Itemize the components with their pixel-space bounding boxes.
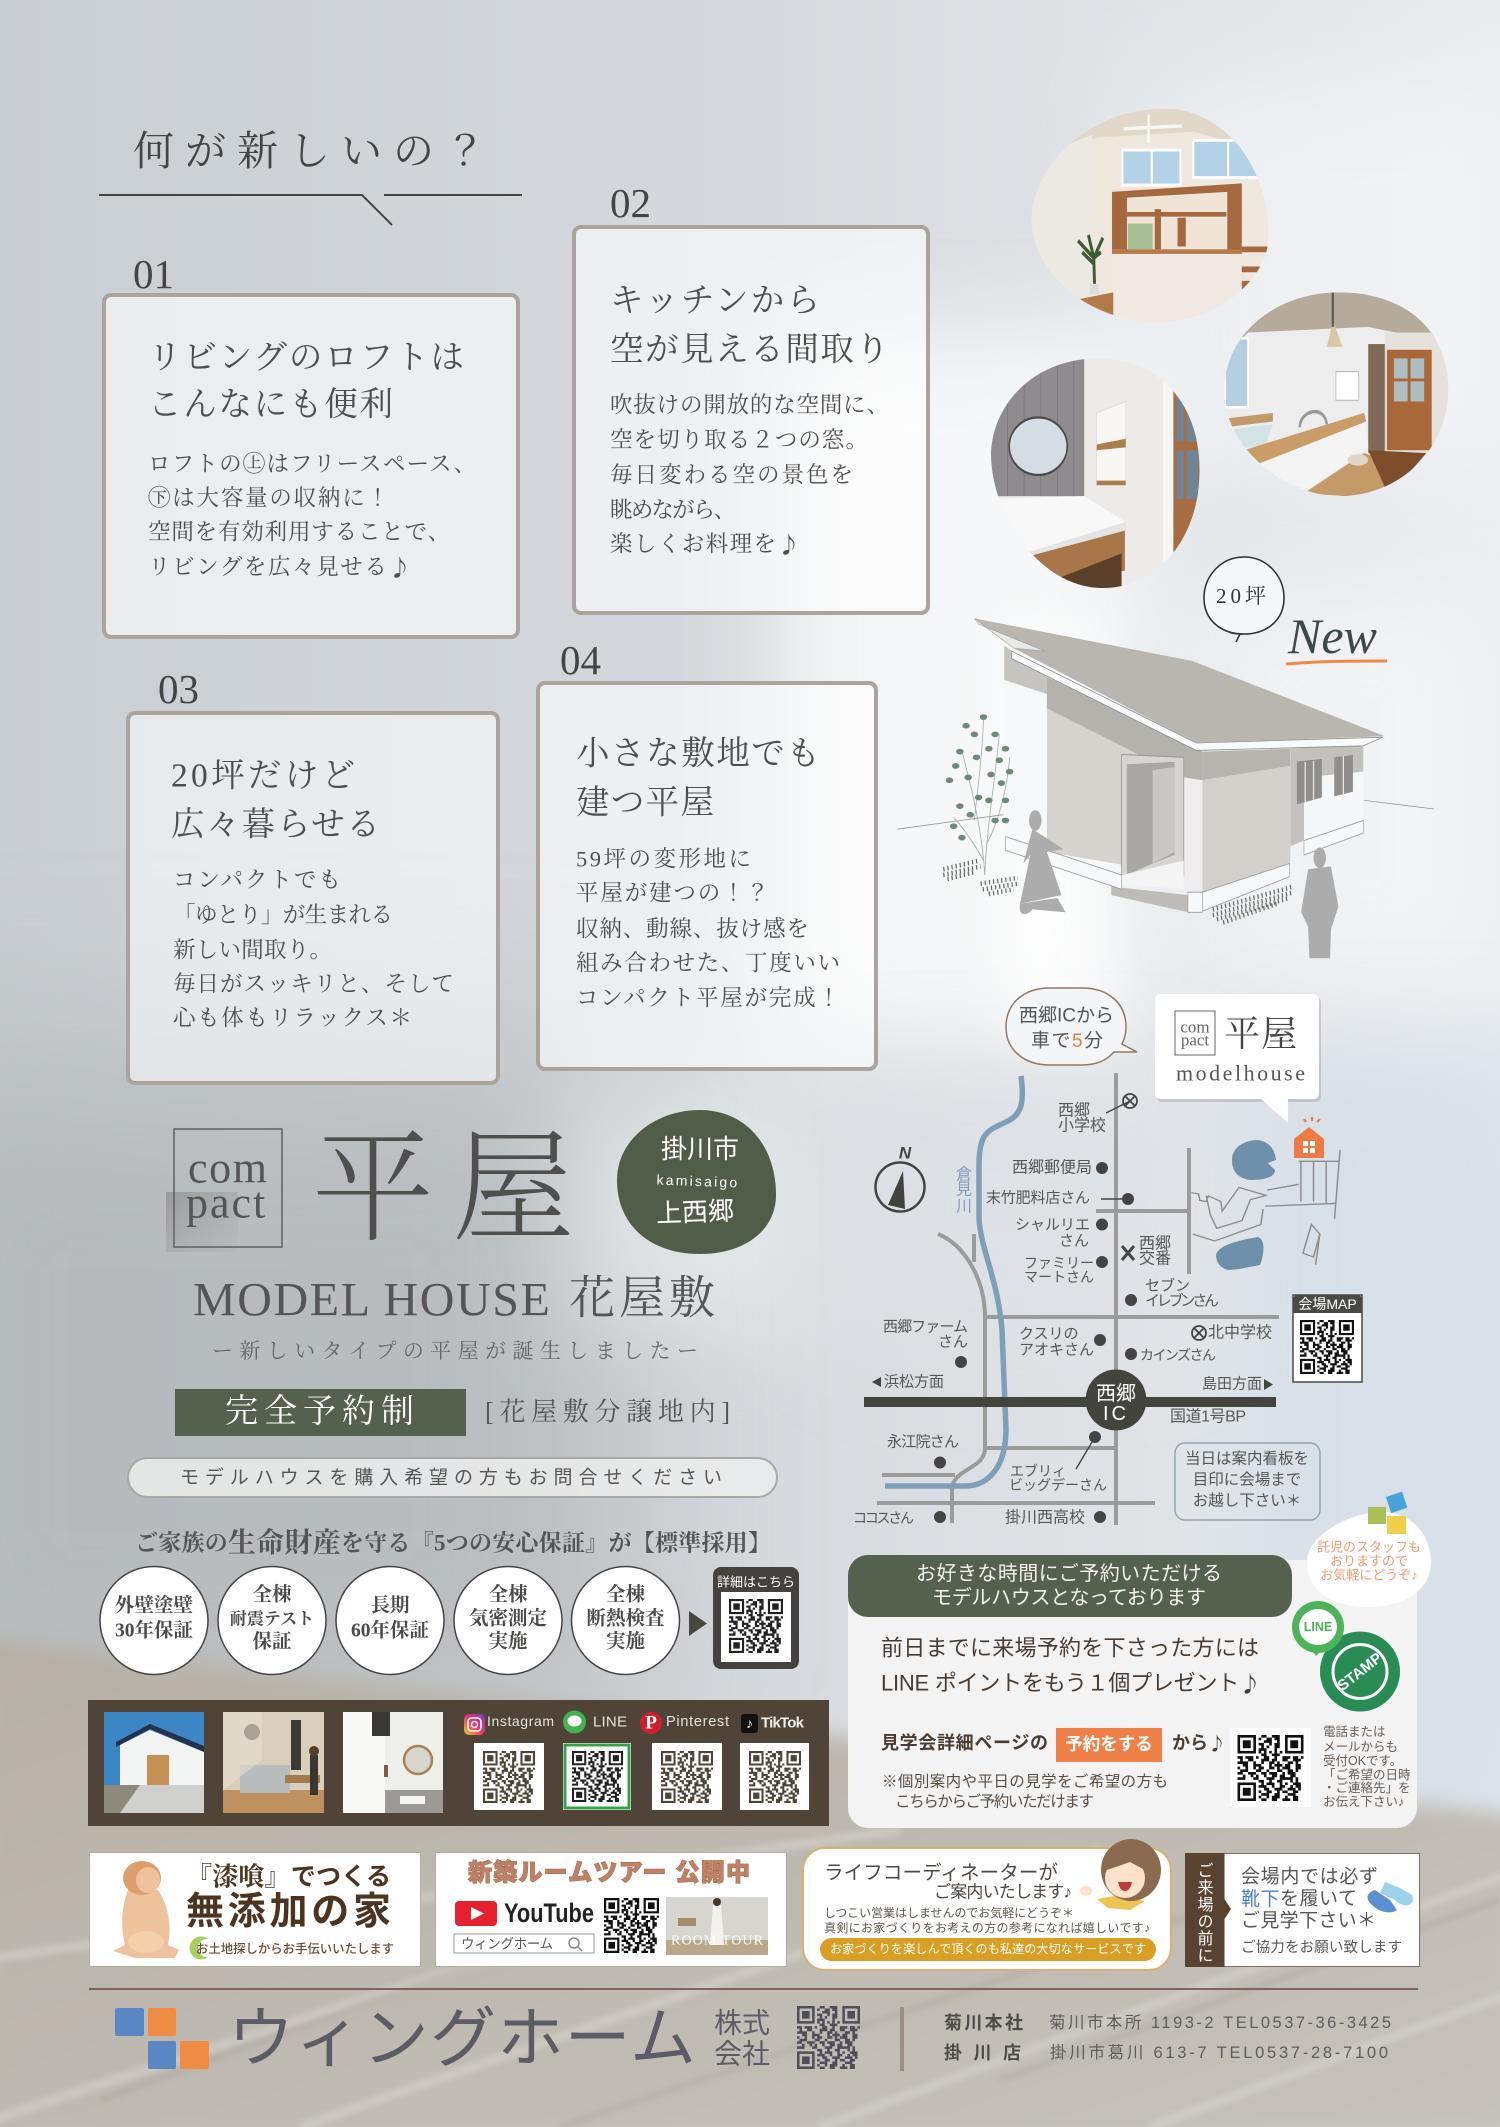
button: 予約をする (1056, 1728, 1162, 1762)
footer: addresses (900, 2007, 1391, 2071)
banner: socks notice: ご見学下さい＊ (1241, 1910, 1376, 1932)
badge: 掛川市 上西郷: 掛川市 (661, 1134, 739, 1164)
place labels: 西郷 (1139, 1234, 1171, 1252)
place labels: エブリィ (1010, 1463, 1066, 1479)
panel 04: small site: 収納、動線、抜け感を (576, 916, 809, 942)
YouTube logo (455, 1898, 594, 1928)
gold pill: お家づくりを楽しんで頂くのも私達の大切なサービスです (830, 1942, 1146, 1956)
photo: washroom (343, 1712, 443, 1813)
QR: 会場MAP (1293, 1295, 1362, 1382)
side tab: ご来場の前に: ご来場の前に (1194, 1862, 1214, 1964)
YouTube logo: YouTube (504, 1898, 594, 1928)
footer: company logo: 会社 (714, 2038, 770, 2070)
panel 04: small site: 小さな敷地でも (576, 736, 820, 772)
place labels: 川 (956, 1198, 972, 1216)
heading: 5つの安心保証: ご家族の生命財産を守る『5つの安心保証』が【標準採用】 (135, 1526, 771, 1558)
banner: socks notice: 会場内では必ず (1241, 1866, 1378, 1888)
button: 予約をする: 予約をする (1065, 1734, 1153, 1754)
panel 01: loft: ロフトの㊤はフリースペース、 (148, 452, 476, 476)
compact box: pact (186, 1178, 267, 1228)
callout: compact 平屋 modelhouse: pact (1181, 1030, 1209, 1050)
place labels: マートさん (1024, 1269, 1094, 1285)
place labels: 島田方面 (1202, 1376, 1262, 1392)
header band: お好きな時間にご予約いただける (916, 1562, 1222, 1585)
circle: 30 year (100, 1566, 208, 1674)
footer: addresses: 掛川市葛川 613-7 TEL0537-28-7100 (1050, 2043, 1388, 2062)
IC marker (1086, 1370, 1146, 1430)
photo: kitchen (1221, 290, 1451, 499)
school and police markers (1122, 1094, 1206, 1340)
icon: LINE stamp: LINE (1304, 1620, 1332, 1634)
side tab: ご来場の前に (1185, 1853, 1231, 1967)
banner: plaster house: 『漆喰』でつくる (186, 1862, 391, 1892)
panel 03: 20 tsubo: 心も体もリラックス＊ (173, 1006, 412, 1030)
circle: seismic: 耐震テスト (230, 1608, 314, 1628)
QR codes (474, 1743, 809, 1810)
Instagram (464, 1713, 554, 1735)
panel 01: loft (104, 251, 518, 637)
panel 01: loft: こんなにも便利 (148, 386, 393, 424)
panel 03: 20 tsubo: 03 (158, 666, 199, 712)
panel 02: kitchen: 毎日変わる空の景色を (610, 462, 853, 488)
place labels: 西郷ファーム (883, 1318, 968, 1336)
footer: company logo: ウィングホーム (228, 2001, 696, 2075)
room tour thumbnail (666, 1897, 768, 1955)
search box: ウィングホーム (461, 1936, 553, 1952)
footer divider (89, 1988, 1418, 1990)
panel: reservation: 見学会詳細ページの (881, 1732, 1048, 1753)
place labels: 西郷郵便局 (1012, 1158, 1092, 1176)
TikTok (741, 1714, 805, 1733)
LINE: LINE (593, 1714, 627, 1730)
header band (848, 1555, 1292, 1617)
callout: compact 平屋 modelhouse: 平屋 (1224, 1014, 1298, 1054)
panel: reservation: LINE ポイントをもう１個プレゼント♪ (881, 1667, 1261, 1699)
panel 03: 20 tsubo (128, 666, 498, 1083)
circle: airtight (454, 1566, 562, 1674)
banner: socks notice: 靴下を履いて (1241, 1888, 1357, 1910)
photo: loft living (1028, 103, 1273, 327)
circle: airtight: 気密測定 (469, 1608, 547, 1630)
panel 03: 20 tsubo: 新しい間取り。 (173, 938, 332, 962)
QR (1230, 1728, 1311, 1807)
circle: insulation: 全棟 (606, 1584, 645, 1606)
roads (877, 1073, 1279, 1525)
photo: house exterior (104, 1712, 204, 1813)
panel 02: kitchen: 空が見える間取り (610, 332, 889, 368)
circle: 60 year: 長期 (370, 1594, 410, 1616)
Pinterest: P (645, 1712, 657, 1734)
panel 01: loft: リビングを広々見せる♪ (148, 551, 411, 583)
panel 04: small site: 平屋が建つの！？ (576, 880, 769, 906)
note: 当日は案内看板: 当日は案内看板を (1185, 1450, 1309, 1468)
callout: childcare staff: 託児のスタッフも (1317, 1540, 1421, 1554)
note: phone or email: ・ご連絡先」を (1323, 1780, 1411, 1795)
Instagram: Instagram (487, 1713, 554, 1729)
place labels: 倉 (956, 1166, 972, 1184)
IC marker: IC (1103, 1403, 1129, 1425)
panel 04: small site: 建つ平屋 (576, 784, 714, 822)
panel 04: small site: コンパクト平屋が完成！ (576, 986, 840, 1010)
title: 何が新しいの？ (99, 128, 522, 225)
tree and shrubs (943, 714, 1294, 923)
panel 04: small site (538, 637, 876, 1069)
banner: socks notice (1185, 1853, 1420, 1967)
New script mark: New (1287, 608, 1377, 664)
panel 02: kitchen: 吹抜けの開放的な空間に、 (610, 392, 889, 418)
direction arrows (872, 1377, 1273, 1390)
place labels: 北中学校 (1208, 1324, 1272, 1342)
circle: seismic (218, 1566, 326, 1674)
callout: 5 minutes from IC (1006, 988, 1137, 1065)
circle: 60 year (336, 1566, 444, 1674)
arrow (689, 1611, 707, 1636)
callout: compact 平屋 modelhouse: modelhouse (1176, 1060, 1305, 1086)
label: 完全予約制 (175, 1389, 466, 1436)
badge: 掛川市 上西郷: 上西郷 (655, 1196, 735, 1228)
place labels: 交番 (1139, 1250, 1171, 1268)
banner: socks notice: ご協力をお願い致します (1241, 1939, 1402, 1956)
icon: house marker (1294, 1117, 1324, 1158)
band: photos and SNS (88, 1700, 829, 1826)
place labels: シャルリエ (1015, 1216, 1090, 1234)
tagline: ー新しいタイプの平屋が誕生しましたー (212, 1339, 698, 1363)
panel 02: kitchen: キッチンから (610, 282, 820, 320)
banner: life coordinator: しつこい営業はしませんのでお気軽にどうぞ＊ (824, 1905, 1074, 1920)
panel 02: kitchen: 眺めながら、 (610, 498, 736, 522)
callout: 20坪: 20坪 (1216, 584, 1270, 608)
logo squares (115, 2008, 209, 2069)
place labels: ファミリー (1024, 1255, 1094, 1271)
search box (454, 1934, 594, 1953)
circle: seismic: 全棟 (252, 1584, 292, 1606)
banner: life coordinator: ご案内いたします♪ (934, 1882, 1072, 1902)
place labels: 永江院さん (887, 1434, 959, 1450)
circle: seismic: 保証 (252, 1630, 292, 1652)
panel: reservation (848, 1555, 1417, 1828)
note: 当日は案内看板 (1175, 1443, 1320, 1520)
banner: life coordinator (803, 1839, 1171, 1970)
icon: north compass (876, 1144, 924, 1212)
place labels: さん (1059, 1232, 1089, 1250)
logo: compact 平屋: 平屋 (312, 1122, 592, 1258)
badge: 掛川市 上西郷: kamisaigo (656, 1172, 740, 1190)
panel 02: kitchen (574, 180, 928, 613)
footer: addresses: 菊川市本所 1193-2 TEL0537-36-3425 (1049, 2013, 1391, 2032)
panel 03: 20 tsubo: コンパクトでも (173, 868, 341, 892)
Pinterest: Pinterest (666, 1714, 729, 1730)
title: 何が新しいの？: 何が新しいの？ (133, 128, 497, 174)
header band: モデルハウスとなっております (932, 1586, 1206, 1609)
panel: reservation: から♪ (1172, 1730, 1226, 1756)
panel: reservation: ※個別案内や平日の見学をご希望の方も (882, 1772, 1168, 1790)
pill: purchase notice (128, 1458, 777, 1497)
panel 02: kitchen: 02 (610, 180, 651, 226)
panel 04: small site: 組み合わせた、丁度いい (576, 950, 840, 976)
place labels: クスリの (1019, 1326, 1079, 1342)
QR: 詳細はこちら: 詳細はこちら (717, 1574, 795, 1590)
panel 02: kitchen: 空を切り取る２つの窓。 (610, 428, 868, 452)
note: phone or email: 受付OKです。 (1323, 1754, 1402, 1768)
photo: family in kitchen (223, 1712, 324, 1813)
footer: addresses: 掛川店 (944, 2042, 1021, 2063)
place labels: さん (938, 1334, 968, 1350)
pill: purchase notice: モデルハウスを購入希望の方もお問合せください (180, 1466, 722, 1488)
QR: 詳細はこちら (713, 1567, 799, 1669)
circle: airtight: 全棟 (488, 1584, 528, 1606)
label: 完全予約制: 完全予約制 (225, 1393, 420, 1430)
callout: 5 minutes from IC: 西郷ICから (1019, 1004, 1114, 1026)
note: phone or email: 「ご希望の日時 (1323, 1767, 1411, 1782)
place labels: 末竹肥料店さん (986, 1190, 1090, 1206)
baby (113, 1861, 179, 1958)
panel 01: loft: 01 (133, 251, 174, 297)
note: phone or email (1323, 1725, 1411, 1809)
icon: LINE stamp (1292, 1601, 1400, 1712)
note: phone or email: 電話または (1323, 1725, 1386, 1739)
place labels: セブン (1145, 1276, 1190, 1294)
place dots (934, 1101, 1137, 1523)
logo: compact 平屋 (166, 1122, 592, 1258)
QR: 会場MAP: 会場MAP (1298, 1296, 1357, 1312)
footer: addresses: 菊川本社 (944, 2013, 1023, 2033)
streets (1191, 1150, 1340, 1265)
heading: MODEL HOUSE 花屋敷: 花屋敷 (569, 1272, 719, 1324)
character: coordinator (1080, 1839, 1161, 1910)
panel 03: 20 tsubo: 広々暮らせる (171, 806, 380, 844)
note: phone or email: メールからも (1323, 1740, 1398, 1754)
map (853, 1073, 1340, 1526)
place labels: 浜松方面 (884, 1374, 944, 1390)
place labels: カインズさん (1140, 1347, 1216, 1363)
banner: life coordinator: ライフコーディネーターが (824, 1862, 1058, 1884)
footer: company logo: 株式 (714, 2008, 770, 2038)
place labels: 西郷 (1058, 1102, 1090, 1120)
badge: 掛川市 上西郷 (617, 1110, 776, 1254)
panel 03: 20 tsubo: 20坪だけど (171, 758, 355, 794)
gold pill (820, 1938, 1156, 1961)
river (885, 1076, 1022, 1486)
place labels (853, 1102, 1272, 1526)
panel: reservation: こちらからご予約いただけます (895, 1792, 1094, 1810)
panel 01: loft: ㊦は大容量の収納に！ (148, 486, 389, 510)
banner: plaster house: お土地探しからお手伝いいたします (196, 1941, 394, 1956)
icon: socks (1368, 1882, 1413, 1912)
Pinterest (640, 1712, 729, 1734)
panel 01: loft: リビングのロフトは (148, 340, 464, 376)
icon: LINE stamp: STAMP (1335, 1649, 1385, 1695)
heading: MODEL HOUSE 花屋敷 (193, 1272, 719, 1326)
national road (864, 1397, 1276, 1407)
callout: childcare staff: お気軽にどうぞ♪ (1320, 1568, 1418, 1582)
banner: plaster house: 無添加の家 (186, 1891, 391, 1933)
callout: compact 平屋 modelhouse (1155, 994, 1321, 1123)
circle: insulation (572, 1566, 680, 1674)
place labels: 見 (956, 1180, 972, 1198)
panel: reservation: 前日までに来場予約を下さった方には (881, 1636, 1259, 1660)
footer: QR (797, 2006, 860, 2069)
circle: 30 year: 外壁塗壁 (115, 1594, 193, 1616)
house (898, 618, 1434, 912)
place labels: 掛川西高校 (1005, 1508, 1085, 1526)
place labels: 小学校 (1058, 1116, 1106, 1134)
location: 花屋敷分譲地内: [花屋敷分譲地内] (485, 1398, 730, 1426)
panel 01: loft: 空間を有効利用することで、 (148, 520, 450, 544)
place labels: アオキさん (1019, 1342, 1094, 1358)
room tour thumbnail: ROOM TOUR (671, 1934, 764, 1948)
banner: life coordinator: 真剣にお家づくりをお考えの方の参考になれば嬉しいです♪ (824, 1920, 1150, 1935)
silhouettes: woman, cat and man (1020, 810, 1338, 958)
ponds (1216, 1140, 1276, 1270)
heading: MODEL HOUSE 花屋敷: MODEL HOUSE (193, 1274, 551, 1326)
TikTok: TikTok (761, 1714, 805, 1732)
panel 04: small site: 04 (560, 637, 601, 683)
callout: childcare staff (1307, 1492, 1431, 1607)
note: 当日は案内看板: お越し下さい＊ (1193, 1492, 1301, 1510)
circle: 60 year: 60年保証 (351, 1618, 429, 1642)
circle: insulation: 断熱検査 (586, 1606, 665, 1630)
banner: plaster house (90, 1852, 420, 1966)
LINE (563, 1710, 627, 1734)
circle: 30 year: 30年保証 (115, 1618, 193, 1642)
panel 02: kitchen: 楽しくお料理を♪ (610, 528, 800, 560)
illustration: house with tree and people (898, 618, 1434, 958)
IC marker: 西郷 (1096, 1382, 1136, 1405)
banner: room tour: 新築ルームツアー 公開中 (468, 1858, 750, 1886)
callout: 5 minutes from IC: 車で5分 (1031, 1030, 1103, 1052)
panel 04: small site: 59坪の変形地に (576, 846, 751, 872)
banner: room tour (436, 1852, 786, 1966)
callout: compact 平屋 modelhouse: com (1180, 1018, 1210, 1036)
circle: insulation: 実施 (606, 1630, 645, 1652)
icon: north compass: N (899, 1144, 912, 1162)
place labels: ココスさん (853, 1510, 914, 1526)
photos: interior blobs (989, 103, 1451, 591)
place labels: イレブンさん (1145, 1292, 1219, 1310)
photo: washroom (989, 356, 1202, 591)
compact box: com (188, 1144, 269, 1192)
note: phone or email: お伝え下さい♪ (1323, 1795, 1404, 1809)
callout: 20坪 (1204, 557, 1284, 642)
circle: airtight: 実施 (488, 1630, 528, 1652)
note: 当日は案内看板: 目印に会場まで (1193, 1470, 1301, 1488)
compact box (166, 1129, 282, 1252)
panel 03: 20 tsubo: 毎日がスッキリと、そして (173, 972, 454, 996)
callout: childcare staff: おりますので (1330, 1554, 1408, 1568)
TikTok: ♪ (746, 1715, 753, 1731)
place labels: 国道1号BP (1170, 1408, 1246, 1426)
guarantees: five circles (100, 1566, 680, 1674)
panel 03: 20 tsubo: 「ゆとり」が生まれる (173, 902, 393, 928)
place labels: ビッグデーさん (1009, 1477, 1107, 1493)
